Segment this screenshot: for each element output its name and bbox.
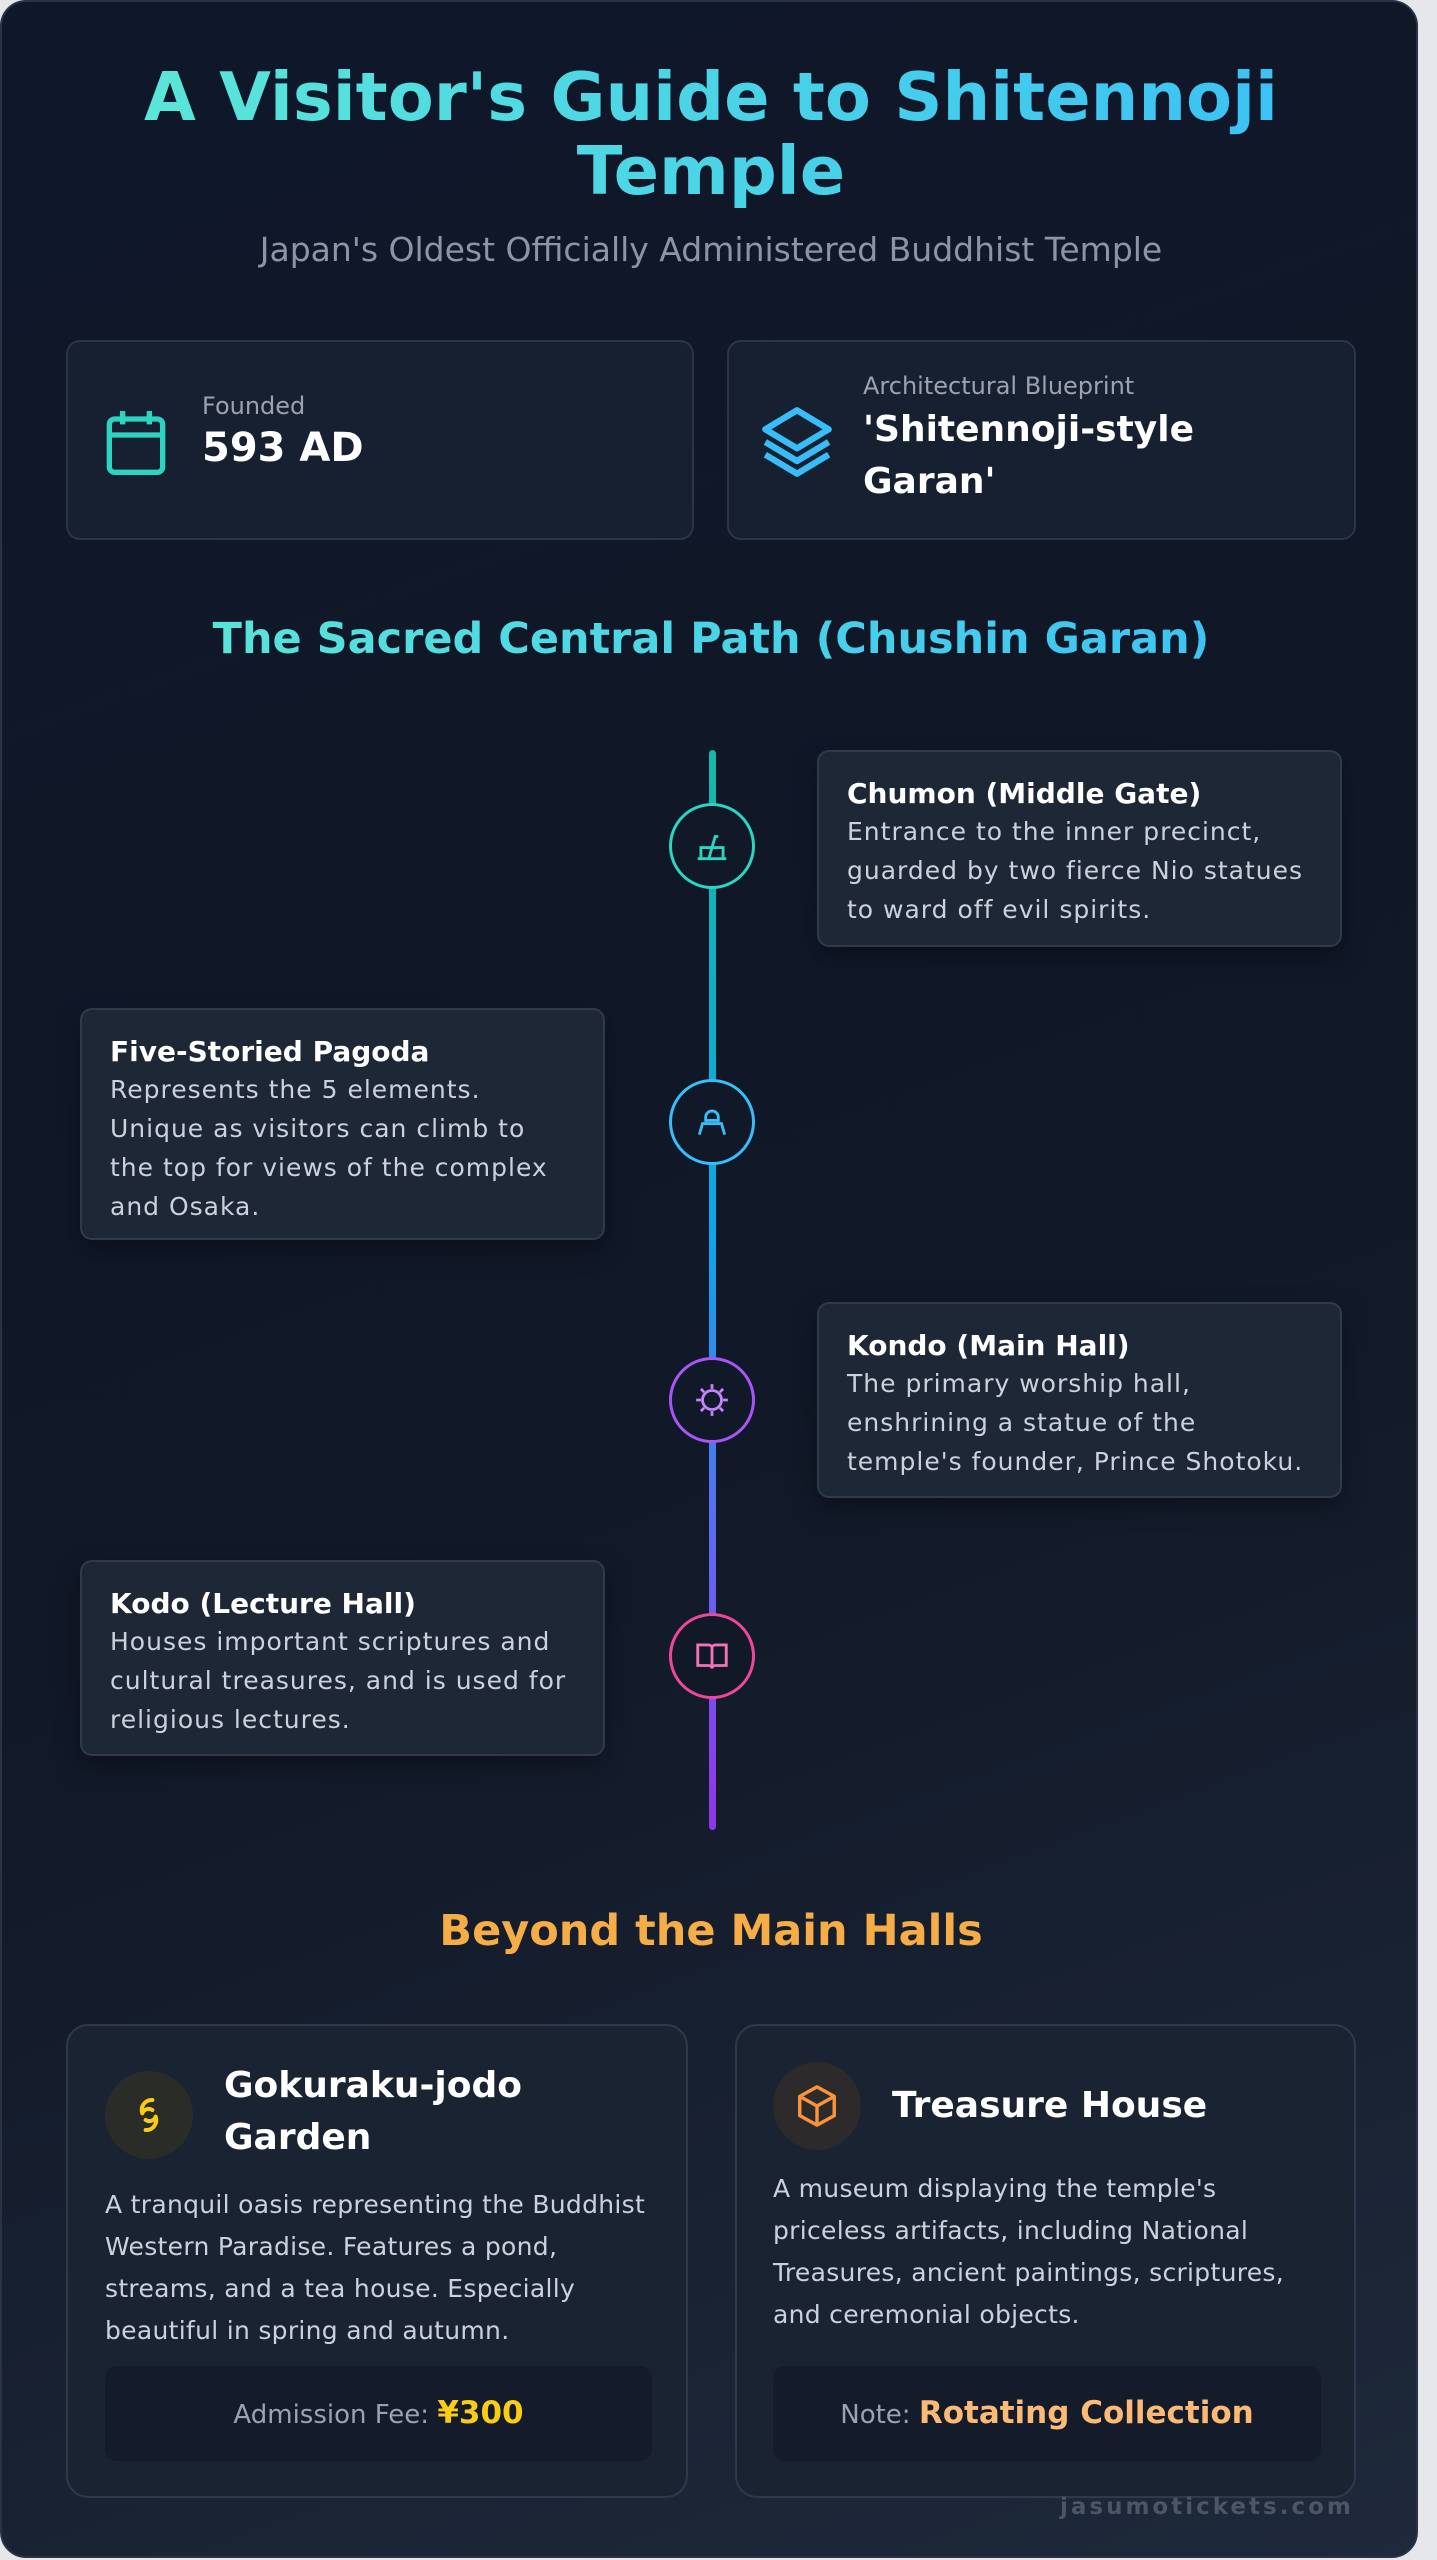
card: kondo: temple's founder, Prince Shotoku. (847, 1447, 1303, 1476)
treasure text: Treasures, ancient paintings, scriptures, (773, 2258, 1284, 2287)
founded text: 593 AD (202, 425, 364, 471)
panel: treasure house (735, 2024, 1356, 2498)
panel: garden (66, 2024, 688, 2498)
icon: garden (105, 2071, 193, 2159)
garden title: Garden (224, 2117, 371, 2158)
treasure title: Treasure House (892, 2085, 1207, 2126)
node: kondo (669, 1357, 755, 1443)
fee box: Admission Fee: ¥300 (233, 2395, 524, 2431)
founded text: Founded (202, 392, 305, 420)
stat card: blueprint (727, 340, 1356, 540)
card: pagoda: Five-Storied Pagoda (110, 1035, 429, 1068)
icon: layers (762, 407, 832, 477)
note box (773, 2366, 1321, 2461)
treasure text: priceless artifacts, including National (773, 2216, 1248, 2245)
title: Temple (577, 132, 845, 210)
card: kodo: religious lectures. (110, 1705, 351, 1734)
card: pagoda: Unique as visitors can climb to (110, 1114, 525, 1143)
blueprint text: 'Shitennoji-style (863, 409, 1194, 450)
subtitle: Japan's Oldest Officially Administered Buddhist Temple (260, 230, 1162, 269)
blueprint text: Garan' (863, 461, 996, 502)
blueprint text: Architectural Blueprint (863, 372, 1134, 400)
node: kodo (669, 1613, 755, 1699)
blueprint text (863, 372, 1194, 502)
garden text: A tranquil oasis representing the Buddhist (105, 2190, 645, 2219)
treasure text: A museum displaying the temple's (773, 2174, 1216, 2203)
card: kondo: The primary worship hall, (847, 1369, 1191, 1398)
card: chumon: guarded by two fierce Nio statues (847, 856, 1303, 885)
card: chumon (817, 750, 1342, 947)
card: chumon: to ward off evil spirits. (847, 895, 1151, 924)
icon: calendar (106, 411, 166, 475)
treasure text: and ceremonial objects. (773, 2300, 1080, 2329)
card: chumon: Entrance to the inner precinct, (847, 817, 1261, 846)
card: pagoda: the top for views of the complex (110, 1153, 548, 1182)
garden title (224, 2065, 522, 2158)
fee box (105, 2366, 652, 2461)
treasure text (772, 2174, 1284, 2329)
card: kodo (80, 1560, 605, 1756)
heading: beyond: Beyond the Main Halls (439, 1906, 983, 1956)
garden text (105, 2190, 645, 2345)
node: chumon (669, 803, 755, 889)
timeline line (709, 750, 716, 1830)
garden text: Western Paradise. Features a pond, (105, 2232, 557, 2261)
garden text: beautiful in spring and autumn. (105, 2316, 509, 2345)
card: pagoda: Represents the 5 elements. (110, 1075, 481, 1104)
icon: cube (773, 2062, 861, 2150)
card: pagoda (80, 1008, 605, 1240)
note box: Note: Rotating Collection (840, 2395, 1254, 2431)
card: kodo: cultural treasures, and is used for (110, 1666, 566, 1695)
title: A Visitor's Guide to Shitennoji (144, 58, 1278, 136)
card: pagoda: and Osaka. (110, 1192, 260, 1221)
title (2, 60, 1420, 208)
stat card: founded (66, 340, 694, 540)
watermark: jasumotickets.com (1060, 2494, 1354, 2520)
founded text (202, 392, 364, 471)
node: pagoda (669, 1079, 755, 1165)
card: chumon: Chumon (Middle Gate) (847, 777, 1201, 810)
heading: central path: The Sacred Central Path (Chushin Garan) (213, 614, 1209, 664)
card: kodo: Houses important scriptures and (110, 1627, 550, 1656)
card: kodo: Kodo (Lecture Hall) (110, 1587, 416, 1620)
card: kondo: Kondo (Main Hall) (847, 1329, 1130, 1362)
card: kondo (817, 1302, 1342, 1498)
garden text: streams, and a tea house. Especially (105, 2274, 575, 2303)
garden title: Gokuraku-jodo (224, 2065, 522, 2106)
card: kondo: enshrining a statue of the (847, 1408, 1196, 1437)
